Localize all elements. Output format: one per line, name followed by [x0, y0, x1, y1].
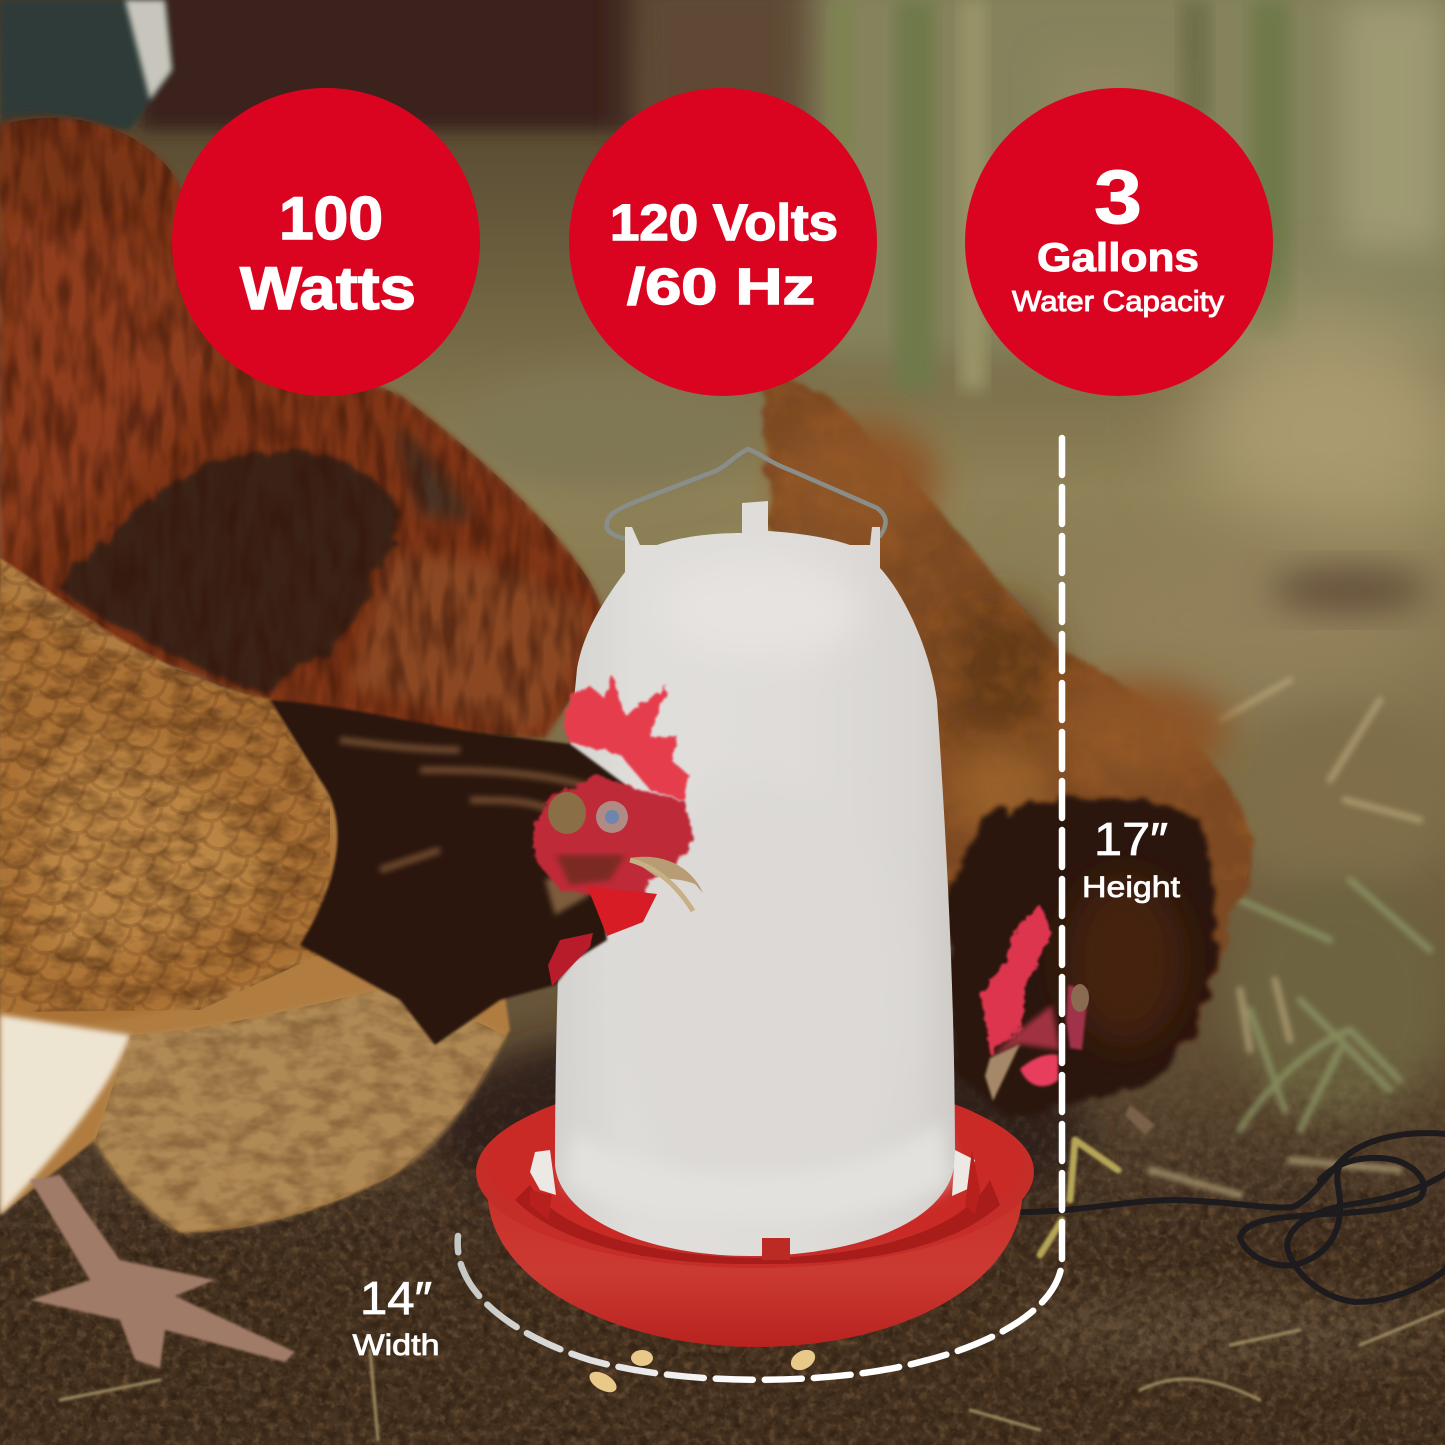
feature badge: voltage	[569, 88, 877, 396]
feature badge: water capacity: Gallons	[1037, 236, 1199, 280]
straw and grass	[1150, 680, 1430, 1195]
power cord	[1022, 1133, 1445, 1302]
icon: wire hanger	[607, 449, 886, 540]
beak	[630, 857, 703, 911]
label: height: 17″	[1094, 813, 1168, 865]
ear	[1066, 985, 1088, 1050]
corn kernels	[586, 1346, 819, 1396]
face	[533, 775, 693, 900]
ear	[548, 792, 586, 834]
red tray body	[488, 1200, 1022, 1347]
label: width: Width	[352, 1329, 440, 1362]
dark breast	[947, 798, 1217, 1116]
label: width	[352, 1272, 440, 1362]
product: heated poultry drinker	[476, 449, 1034, 1347]
label: width: 14″	[360, 1272, 432, 1324]
chicken foot	[30, 1175, 295, 1368]
eye	[596, 801, 628, 833]
feature badge: voltage: /60 Hz	[627, 258, 815, 315]
wattle and beak	[1020, 1054, 1058, 1086]
feature badge: voltage: 120 Volts	[610, 194, 838, 251]
top-left rooster tail	[0, 0, 172, 135]
label: height	[1082, 813, 1181, 904]
feature badge: water capacity: Water Capacity	[1012, 286, 1225, 318]
chicken: front hen	[0, 550, 703, 1368]
chicken: back left hen	[0, 100, 620, 750]
feature badge: water capacity	[965, 88, 1273, 396]
label: height: Height	[1082, 871, 1181, 904]
feature badge: wattage: Watts	[240, 255, 416, 322]
feature badge: wattage: 100	[279, 185, 383, 252]
feature badge: water capacity: 3	[1094, 155, 1142, 240]
comb	[562, 676, 690, 801]
dome reservoir	[555, 501, 955, 1256]
dark neck	[270, 700, 647, 1045]
chicken: right hen	[760, 379, 1260, 1135]
dimension line: height and width	[458, 438, 1062, 1380]
wattles	[587, 886, 657, 936]
comb	[980, 905, 1052, 1055]
tray clips	[530, 1150, 975, 1196]
feature badge: wattage	[172, 88, 480, 396]
